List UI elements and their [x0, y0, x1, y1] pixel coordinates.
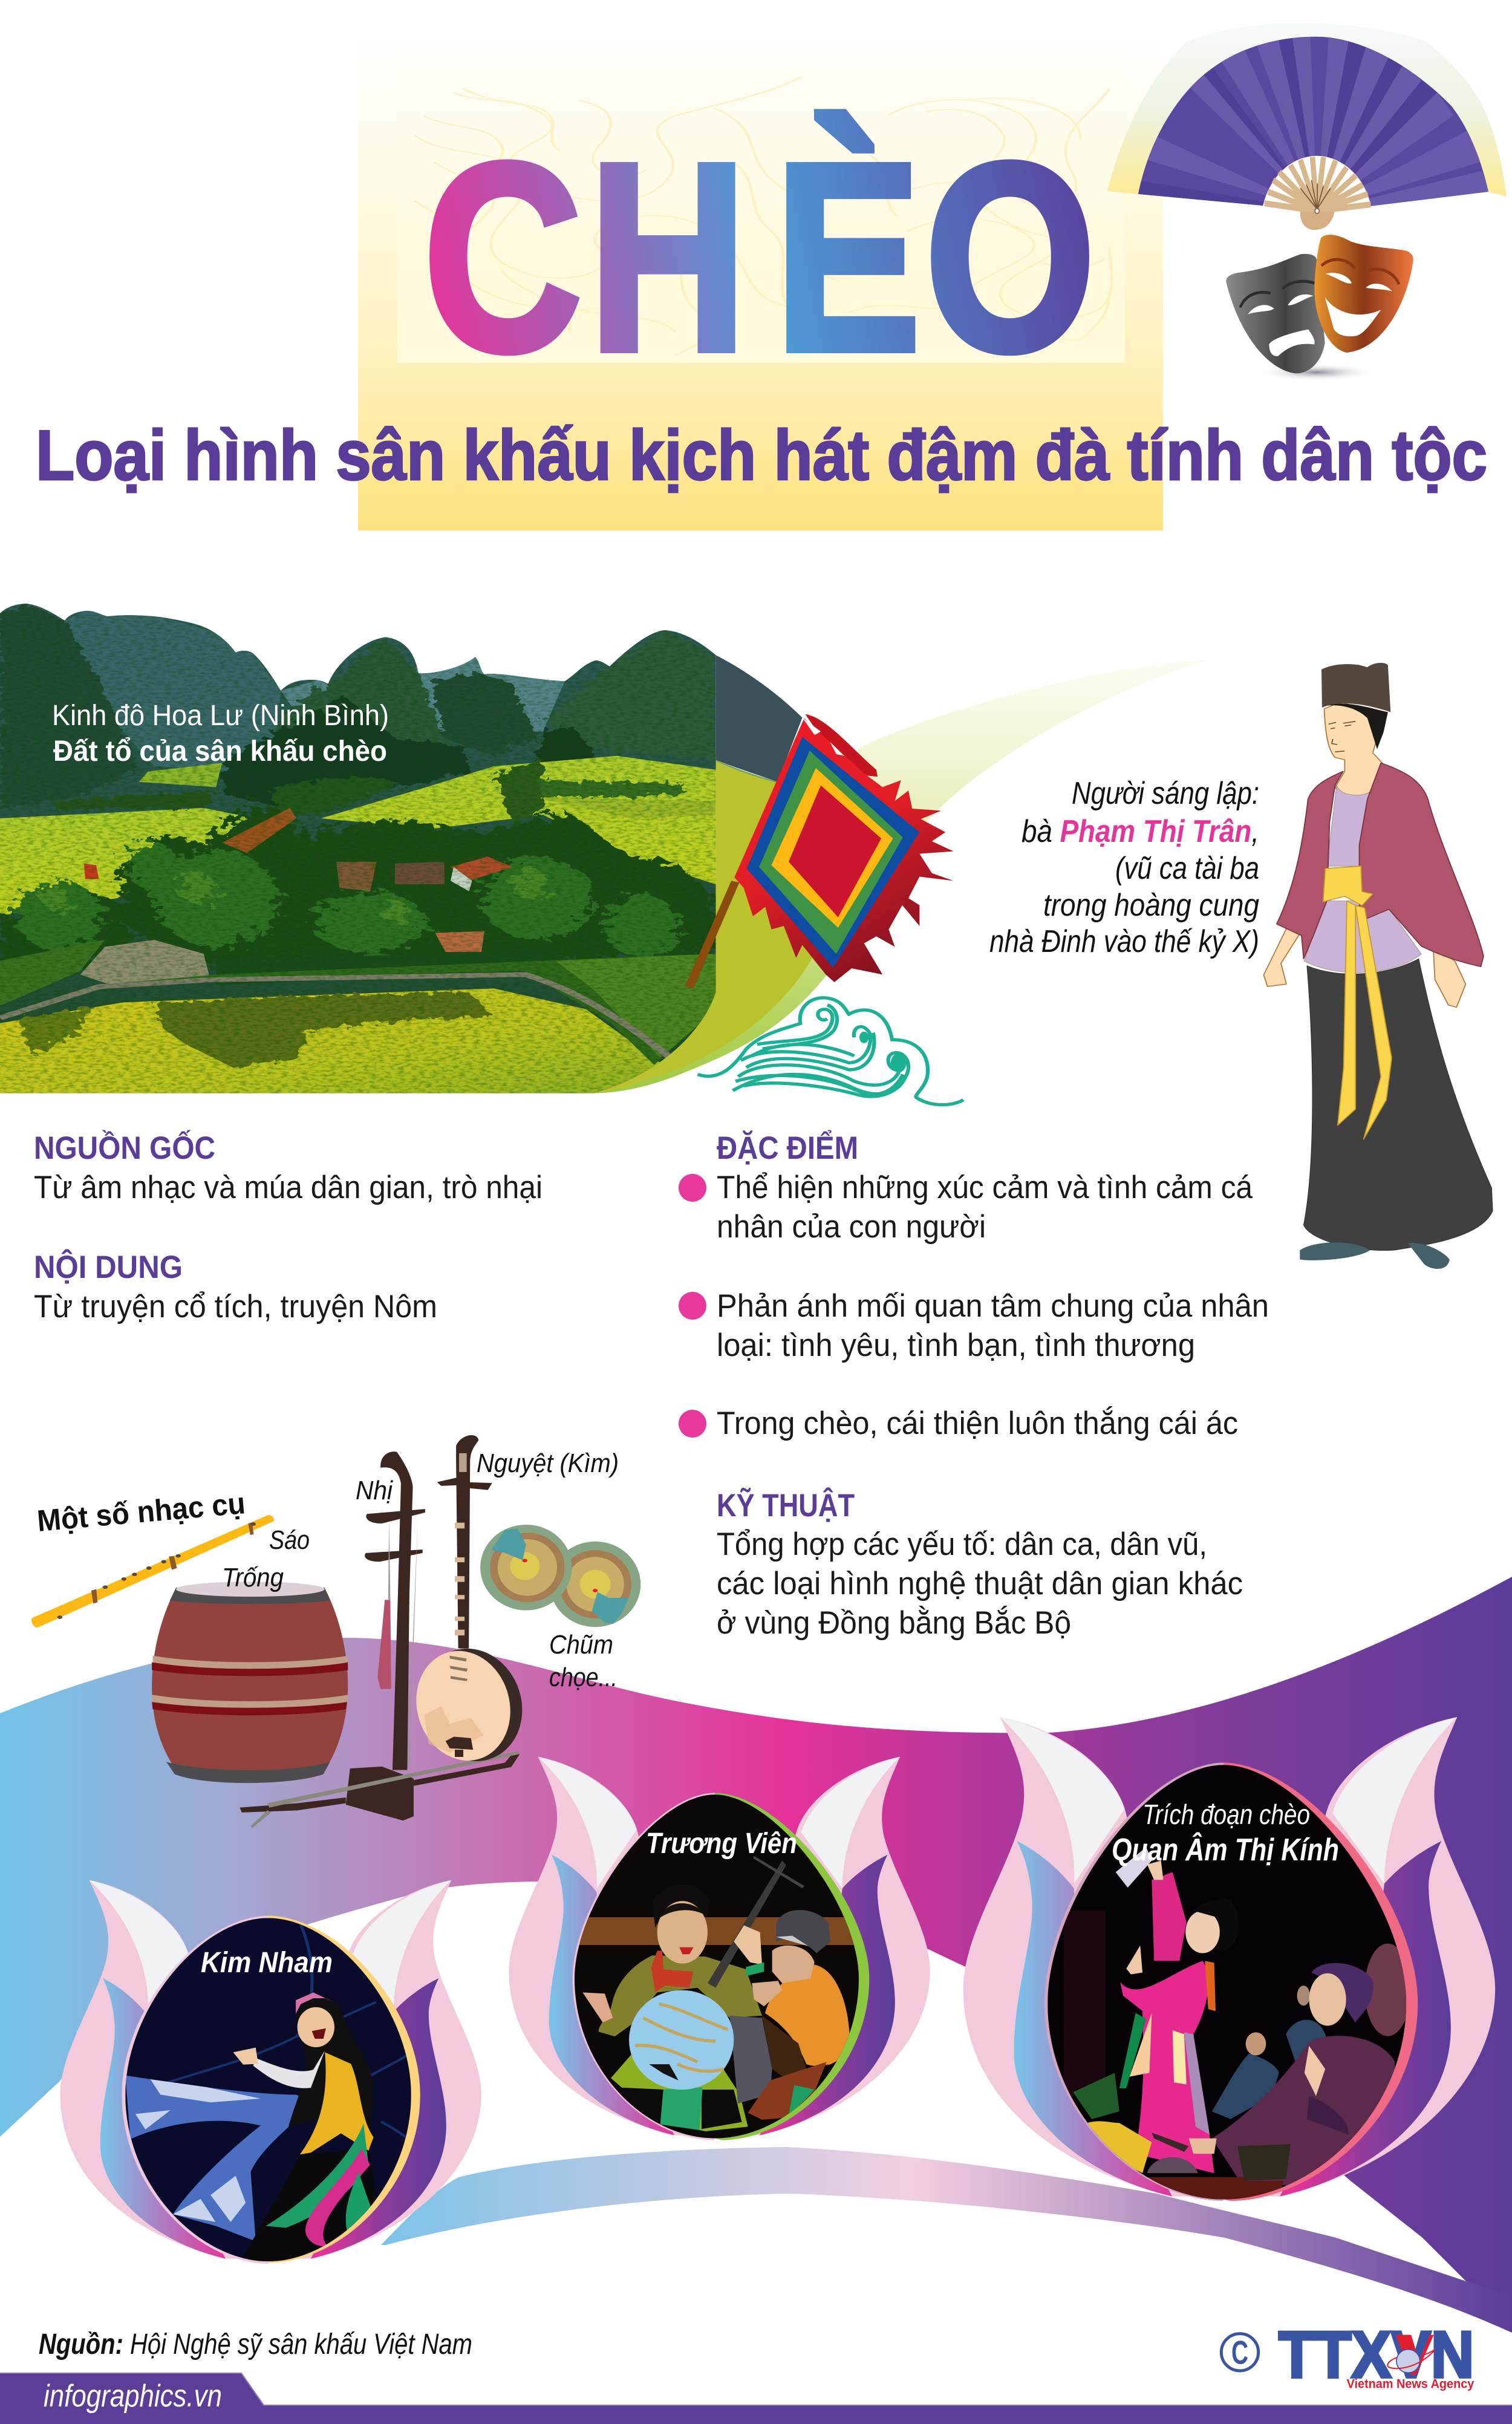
- text block: founder quote: trong hoàng cung: [1043, 888, 1259, 923]
- logo: TTXVN: C: [1231, 2334, 1248, 2371]
- icon: cymbals: [480, 1525, 640, 1627]
- text block: Đặc điểm: [679, 1130, 1269, 1441]
- footer bar: [0, 2373, 1512, 2424]
- icon: teal cloud wave: [698, 998, 963, 1105]
- text block: Đặc điểm: loại: tình yêu, tình bạn, tình thương: [717, 1328, 1195, 1363]
- photo caption: Kinh đô Hoa Lư: [52, 700, 389, 767]
- facial features: [1329, 722, 1355, 752]
- text block: Nguồn gốc: [34, 1130, 543, 1205]
- text block: founder quote: Người sáng lập:: [1072, 776, 1259, 811]
- panel: landscape photo of Hoa Lư: [0, 593, 1207, 1096]
- jacket: [1277, 771, 1343, 959]
- sash: [1323, 866, 1373, 905]
- label: Sáo: Sáo: [269, 1525, 310, 1555]
- hat: [1321, 663, 1390, 712]
- label upper: Trích đoạn chèo: [1142, 1799, 1310, 1830]
- text block: founder quote: nhà Đinh vào thế kỷ X): [989, 924, 1259, 959]
- text block: founder quote: [989, 776, 1259, 959]
- icon: Nhị fiddle: [240, 1451, 520, 1828]
- text block: Kỹ thuật: [717, 1487, 1243, 1641]
- text block: Kỹ thuật: KỸ THUẬT: [717, 1487, 855, 1523]
- skirt: [1304, 959, 1493, 1251]
- label: Kim Nham: [201, 1947, 333, 1979]
- photo caption: Kinh đô Hoa Lư: Kinh đô Hoa Lư (Ninh Bình): [52, 700, 389, 732]
- tulip: Kim Nham: [60, 1880, 481, 2264]
- icon: flag: [685, 714, 954, 988]
- text block: Nội dung: [34, 1248, 437, 1324]
- label: Trương Viên: [646, 1828, 797, 1860]
- text block: Kỹ thuật: các loại hình nghệ thuật dân gian khác: [717, 1566, 1243, 1601]
- tree canopies: [0, 801, 716, 978]
- background panel: yellow gradient rectangle: [358, 18, 1163, 530]
- source line: Nguồn: Hội Nghệ sỹ sân khấu Việt Nam: [39, 2328, 472, 2360]
- heading: Một số nhạc cụ: Một số nhạc cụ: [36, 1486, 247, 1538]
- face and neck: [1324, 702, 1384, 796]
- label: Chũm chọe: [549, 1630, 618, 1692]
- text block: Kỹ thuật: ở vùng Đồng bằng Bắc Bộ: [717, 1605, 1071, 1641]
- text block: Nguồn gốc: NGUỒN GỐC: [34, 1130, 215, 1166]
- hair: [1327, 703, 1388, 749]
- blouse: [1327, 785, 1369, 866]
- icon: theatre masks: [1226, 235, 1413, 381]
- text block: Nội dung: NỘI DUNG: [34, 1248, 183, 1285]
- text block: Đặc điểm: Thể hiện những xúc cảm và tình cảm cá: [717, 1170, 1253, 1205]
- icon: Nguyệt lute: [410, 1435, 529, 1764]
- logo: TTXVN: TTXVN: [1279, 2318, 1474, 2391]
- label: Nguyệt (Kìm): Nguyệt (Kìm): [477, 1448, 619, 1478]
- instruments group: [31, 1435, 640, 1828]
- logo: TTXVN: Vietnam News Agency: [1347, 2376, 1474, 2391]
- label: Chũm chọe: Chũm: [549, 1630, 613, 1660]
- label lower: Quan Âm Thị Kính: [1112, 1832, 1339, 1868]
- text block: Đặc điểm: ĐẶC ĐIỂM: [717, 1130, 858, 1166]
- tulip: Trương Viên: [509, 1757, 930, 2140]
- icon: drum: [152, 1582, 348, 1783]
- label: Nhị: Nhị: [356, 1476, 393, 1505]
- label: Chũm chọe: chọe...: [549, 1663, 618, 1692]
- label: Trống: Trống: [222, 1563, 284, 1592]
- footer bar: infographics.vn: [44, 2379, 222, 2414]
- text block: Nguồn gốc: Từ âm nhạc và múa dân gian, trò nhại: [34, 1170, 543, 1205]
- text block: Nội dung: Từ truyện cổ tích, truyện Nôm: [34, 1289, 437, 1324]
- text block: Đặc điểm: Trong chèo, cái thiện luôn thắng cái ác: [717, 1406, 1238, 1441]
- text block: Kỹ thuật: Tổng hợp các yếu tố: dân ca, dân vũ,: [717, 1526, 1207, 1562]
- figure: founder Phạm Thị Trân: [1263, 663, 1493, 1269]
- photo caption: Kinh đô Hoa Lư: Đất tổ của sân khấu chèo: [53, 735, 387, 767]
- text block: founder quote: bà Phạm Thị Trân,: [1022, 814, 1259, 849]
- background: gradient wave band: [0, 1577, 1512, 2298]
- hands: [1263, 929, 1302, 986]
- title: CHÈO: CHÈO: [423, 108, 1095, 406]
- icon: flute: [31, 1515, 274, 1627]
- background: lower swoosh: [381, 2147, 1512, 2333]
- icon: purple fan: [1107, 23, 1507, 230]
- tulip: Quan Âm Thị Kính: [963, 1717, 1495, 2202]
- text block: founder quote: (vũ ca tài ba: [1115, 851, 1259, 886]
- text block: Đặc điểm: Phản ánh mối quan tâm chung của nhân: [717, 1288, 1269, 1324]
- text block: Đặc điểm: nhân của con người: [717, 1209, 986, 1245]
- shoes: [1300, 1242, 1450, 1269]
